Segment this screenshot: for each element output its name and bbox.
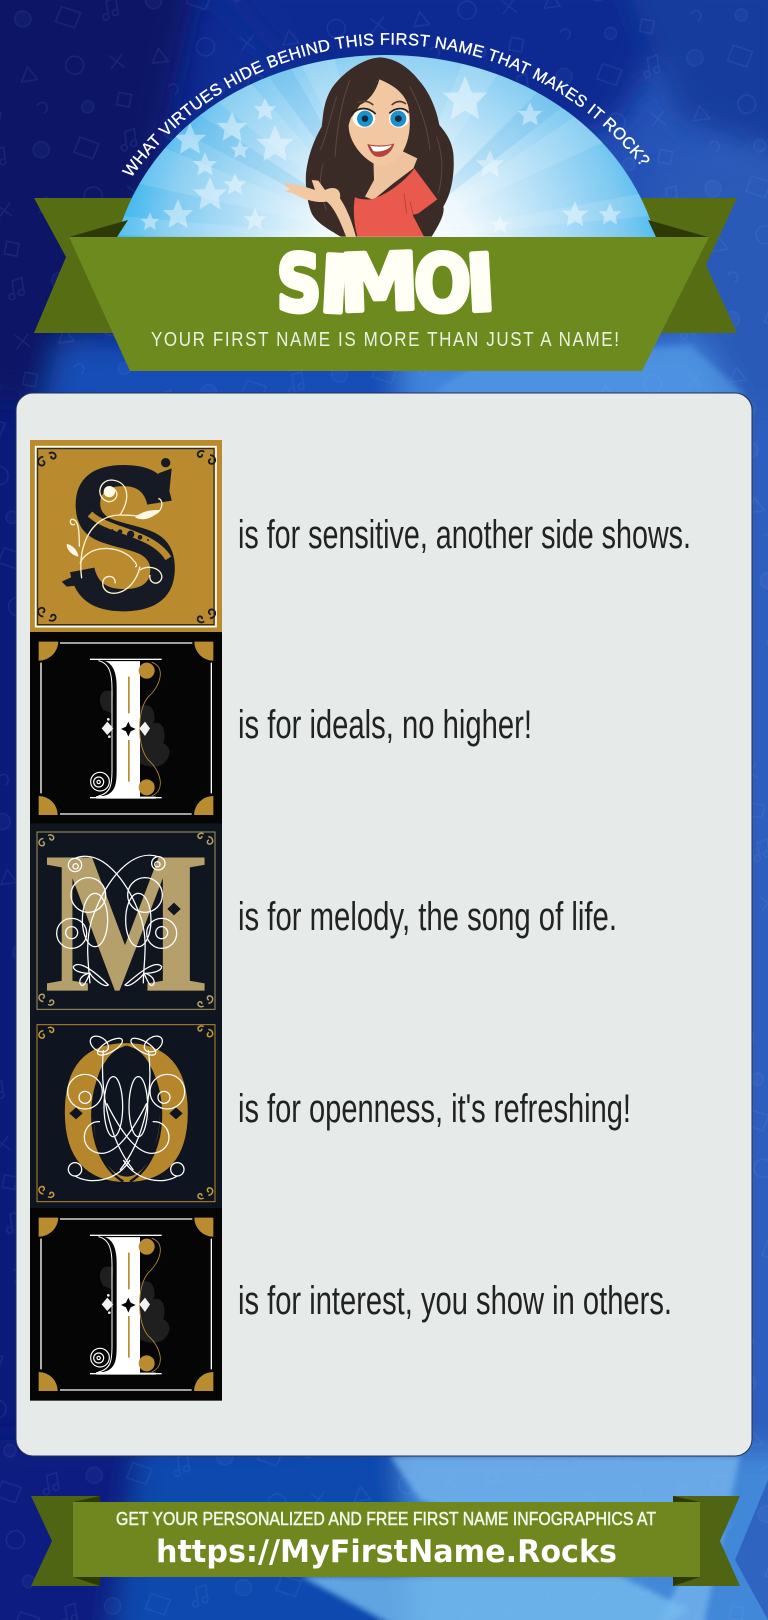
text: I meaning: is for ideals, no higher! [238,703,532,747]
subtitle: YOUR FIRST NAME IS MORE THAN JUST A NAME! [151,328,619,350]
footer url: https://MyFirstName.Rocks [156,1534,617,1570]
ribbon tail: right [640,198,737,333]
stars [140,76,621,233]
sunburst dome [117,55,656,237]
curved heading: WHAT VIRTUES HIDE BEHIND THIS FIRST NAME THAT MAKES IT ROCK? [122,33,650,176]
face [349,79,410,165]
tile: letter O: O [56,996,197,1225]
name title: S [276,240,322,330]
footer ribbon [31,1496,740,1586]
mouth [367,143,394,157]
ribbon tail: left [34,198,140,333]
name title: M [338,237,420,330]
text: O meaning: is for openness, it's refreshing! [238,1087,631,1131]
arm and hand [283,180,356,237]
footer call to action: GET YOUR PERSONALIZED AND FREE FIRST NAME INFOGRAPHICS AT [116,1508,656,1529]
tile: letter I (second) [30,1189,222,1421]
hair [306,57,454,237]
name title: O [414,240,471,330]
neck and chest [365,150,417,200]
text: M meaning: is for melody, the song of life. [238,895,617,939]
eyes [352,101,409,128]
tile: letter S: S [65,422,182,653]
tile: letter I [30,613,222,845]
name title: I [464,239,497,330]
tile: letter M: M [44,810,210,1035]
shirt [354,168,437,237]
panel: meanings [16,393,752,1456]
back ribbon tails [34,198,737,333]
front banner [69,237,709,371]
name title: I [318,240,351,331]
illustration: woman [283,57,454,237]
ribbon fold shadows [69,220,708,237]
